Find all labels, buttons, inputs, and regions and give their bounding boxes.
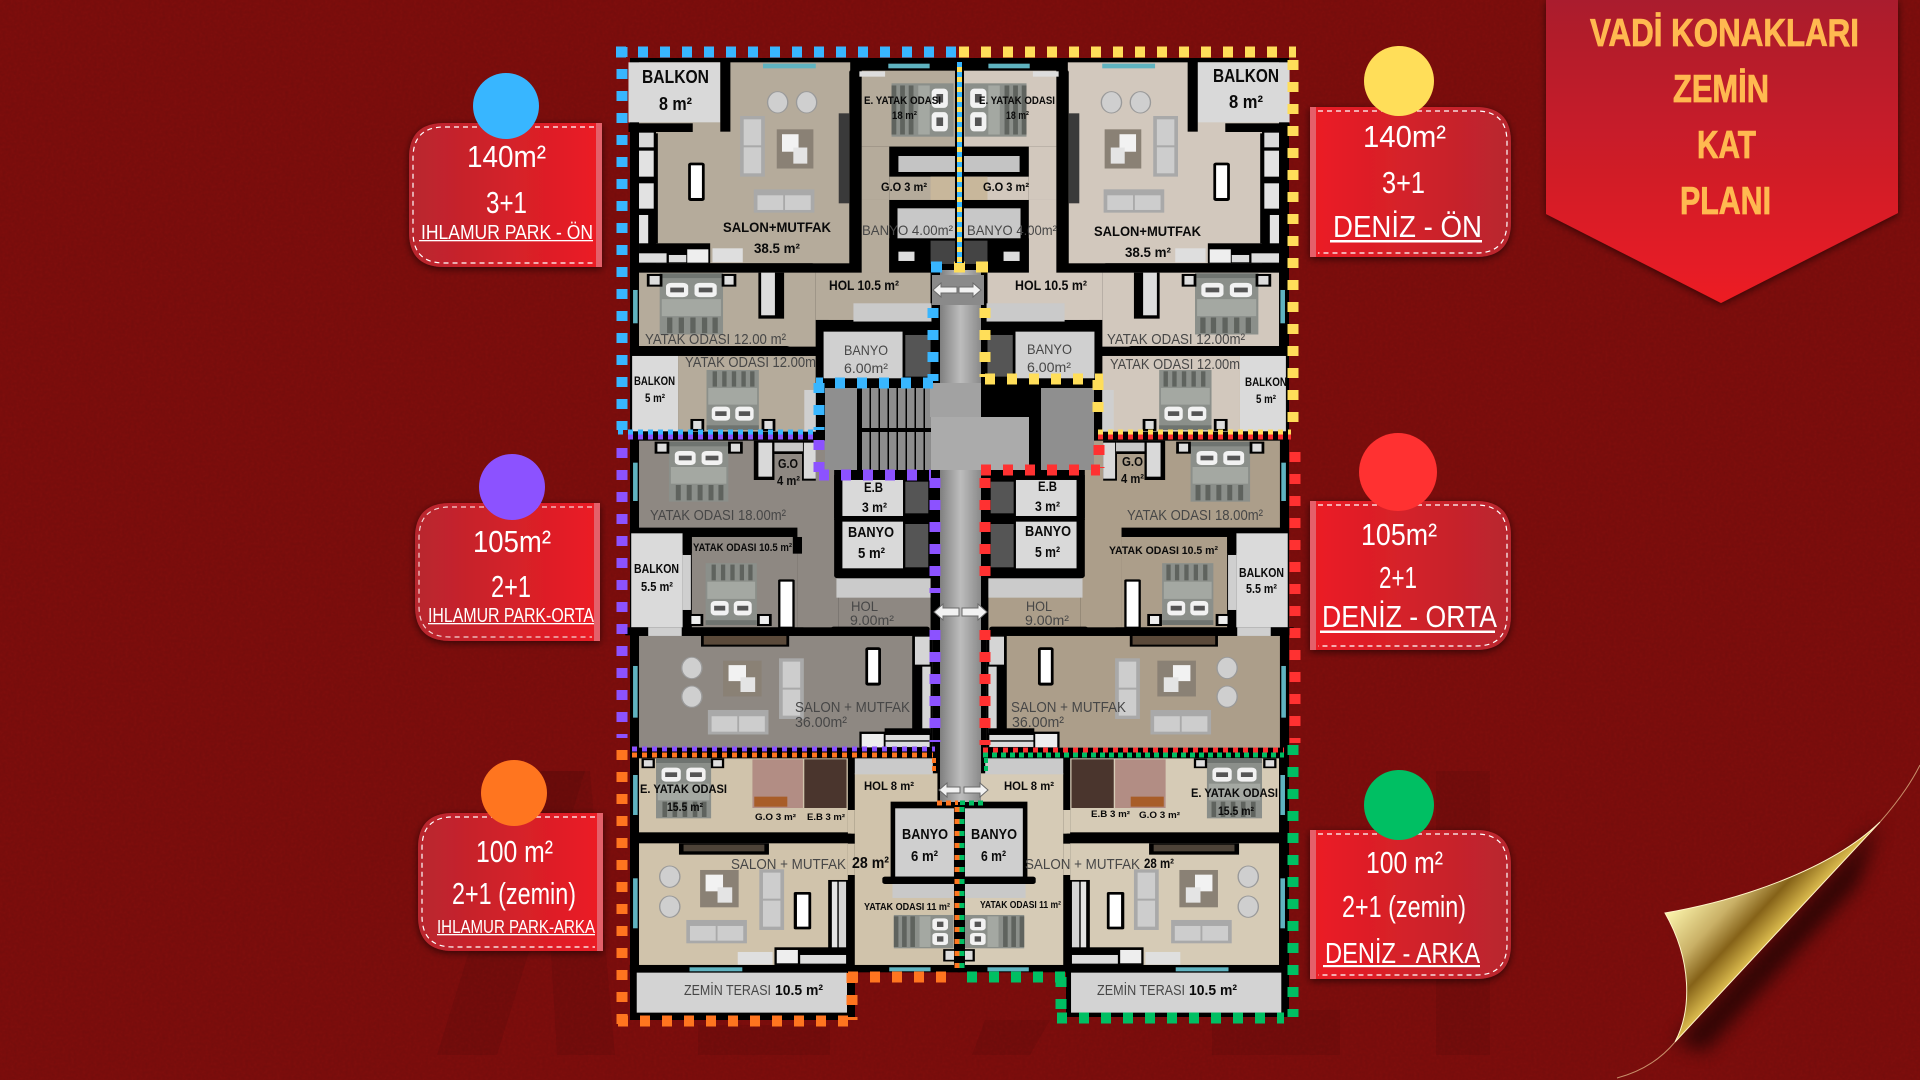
text: 2+1 (zemin) bbox=[452, 876, 576, 911]
room labels: YATAK ODASI 12.00m bbox=[685, 354, 816, 371]
room labels: YATAK ODASI 10.5 m² bbox=[1109, 545, 1218, 557]
room labels: 36.00m² bbox=[1012, 714, 1064, 731]
title text: ZEMİN bbox=[1673, 68, 1769, 111]
room labels: 6 m² bbox=[911, 848, 938, 865]
room labels: BANYO 4.00m² bbox=[862, 222, 953, 238]
apartments top row bbox=[628, 58, 1290, 432]
marker bbox=[473, 73, 539, 139]
callout: Deniz Ön bbox=[1310, 46, 1511, 257]
text: 100 m² bbox=[476, 834, 553, 869]
room labels: HOL 10.5 m² bbox=[829, 277, 899, 293]
centre seam blue and yellow bbox=[955, 60, 964, 263]
apartment outline: green bbox=[960, 745, 1293, 1018]
text: 2+1 bbox=[1379, 560, 1417, 595]
centre seam orange and green bbox=[957, 805, 962, 971]
room labels: HOL bbox=[851, 598, 878, 614]
apartments middle row bbox=[625, 441, 1294, 748]
plan base walls bbox=[630, 58, 1289, 1020]
apartments bottom row bbox=[630, 758, 1288, 1013]
curl sheet bbox=[1665, 822, 1880, 1042]
room labels: BALKON bbox=[1213, 66, 1279, 86]
callout: Deniz Arka bbox=[1310, 770, 1511, 979]
apartment outline: orange bbox=[618, 750, 958, 1025]
apartment outline: red bbox=[981, 437, 1295, 750]
room labels: 9.00m² bbox=[1025, 612, 1069, 628]
room labels: 38.5 m² bbox=[1125, 244, 1171, 260]
text: 2+1 bbox=[491, 569, 531, 604]
title text: KAT bbox=[1697, 124, 1756, 167]
room labels: BANYO 4.00m² bbox=[967, 222, 1057, 238]
room labels: E.B bbox=[864, 479, 883, 495]
room labels: 5.5 m² bbox=[1246, 581, 1278, 596]
room labels: BANYO bbox=[844, 342, 888, 358]
stitching bbox=[1318, 834, 1507, 975]
apartment outline: purple bbox=[622, 437, 935, 749]
room labels: HOL 10.5 m² bbox=[1015, 277, 1087, 293]
banner shape bbox=[1546, 0, 1898, 303]
callout: İhlamur Park Orta bbox=[415, 454, 600, 641]
room labels: 6 m² bbox=[981, 848, 1006, 865]
room labels: HOL 8 m² bbox=[1004, 779, 1054, 793]
room labels: 8 m² bbox=[1229, 92, 1263, 112]
text bbox=[428, 524, 595, 627]
room labels: E. YATAK ODASI bbox=[864, 95, 941, 107]
marker bbox=[1364, 46, 1434, 116]
room labels: 15.5 m² bbox=[1218, 804, 1254, 818]
room labels: 5.5 m² bbox=[641, 579, 674, 594]
room labels: SALON + MUTFAK bbox=[731, 856, 846, 873]
text bbox=[1323, 845, 1481, 970]
ribbon bbox=[1310, 501, 1511, 650]
room labels: YATAK ODASI 12.00m² bbox=[1107, 331, 1245, 348]
stitching bbox=[422, 817, 595, 947]
room labels: BANYO bbox=[971, 826, 1017, 843]
room labels: 36.00m² bbox=[795, 714, 847, 731]
text: 105m² bbox=[1361, 517, 1437, 552]
room labels: BALKON bbox=[634, 374, 675, 388]
callout: İhlamur Park Ön bbox=[409, 73, 602, 267]
ribbon bbox=[1310, 107, 1511, 257]
room labels: ZEMİN TERASI bbox=[1097, 981, 1185, 999]
room labels: 9.00m² bbox=[850, 612, 894, 628]
text: 140m² bbox=[1363, 119, 1446, 154]
room labels: 5 m² bbox=[645, 391, 665, 405]
corridor arrow bottom bbox=[939, 783, 988, 797]
text: 3+1 bbox=[486, 185, 527, 220]
text: 3+1 bbox=[1382, 165, 1425, 200]
ribbon bbox=[1310, 830, 1511, 979]
room labels: 3 m² bbox=[1035, 498, 1060, 514]
callout: Deniz Orta bbox=[1310, 433, 1511, 650]
room labels: 3 m² bbox=[862, 499, 887, 515]
text: IHLAMUR PARK-ORTA bbox=[428, 605, 595, 627]
callout: İhlamur Park Arka bbox=[418, 760, 603, 951]
curl shadow bbox=[1675, 822, 1880, 1052]
ribbon bbox=[418, 813, 603, 951]
room labels: G.O bbox=[1122, 454, 1143, 469]
room labels: 5 m² bbox=[858, 545, 885, 562]
room labels: 4 m² bbox=[1121, 471, 1145, 486]
room labels: SALON+MUTFAK bbox=[1094, 223, 1201, 239]
apartment outline: blue bbox=[616, 47, 958, 432]
text: 140m² bbox=[467, 139, 546, 174]
title banner bbox=[1546, 0, 1898, 303]
room labels: 10.5 m² bbox=[1189, 982, 1237, 999]
room labels: 5 m² bbox=[1035, 544, 1060, 561]
room labels: 4 m² bbox=[777, 473, 801, 488]
room labels: YATAK ODASI 12.00 m² bbox=[645, 331, 786, 348]
room labels: E.B 3 m² bbox=[807, 812, 845, 822]
room labels: 6.00m² bbox=[1027, 359, 1071, 375]
room labels: 15.5 m² bbox=[667, 800, 703, 814]
faint background ghost shapes bbox=[437, 771, 1490, 1055]
room labels: ZEMİN TERASI bbox=[684, 981, 771, 999]
room labels: E. YATAK ODASI bbox=[1191, 786, 1278, 800]
ribbon bbox=[409, 123, 602, 267]
room labels: 5 m² bbox=[1256, 392, 1276, 406]
room labels: BANYO bbox=[848, 524, 894, 541]
marker bbox=[481, 760, 547, 826]
room labels: E.B bbox=[1038, 478, 1057, 494]
room labels: YATAK ODASI 18.00m² bbox=[650, 507, 786, 524]
room labels: G.O 3 m² bbox=[881, 180, 927, 194]
room labels: 38.5 m² bbox=[754, 240, 800, 256]
room labels: G.O 3 m² bbox=[1139, 810, 1180, 820]
ribbon bbox=[415, 503, 600, 641]
room labels: YATAK ODASI 11 m² bbox=[980, 900, 1062, 911]
text: 2+1 (zemin) bbox=[1342, 889, 1466, 924]
room labels: 18 m² bbox=[1006, 110, 1029, 122]
corridor arrow middle bbox=[934, 604, 987, 620]
title text: VADİ KONAKLARI bbox=[1590, 12, 1859, 55]
room labels: YATAK ODASI 12.00m bbox=[1110, 356, 1240, 373]
room labels: HOL bbox=[1026, 598, 1052, 614]
stitching bbox=[1318, 505, 1507, 646]
room labels: SALON+MUTFAK bbox=[723, 219, 831, 235]
marker bbox=[479, 454, 545, 520]
room labels: BANYO bbox=[1027, 341, 1072, 357]
floor plan bbox=[616, 47, 1296, 1025]
curl highlight lines bbox=[1617, 765, 1920, 1078]
room labels: G.O 3 m² bbox=[755, 812, 796, 822]
room labels: BALKON bbox=[1239, 565, 1284, 580]
corridor arrow top bbox=[933, 283, 981, 297]
room labels: E. YATAK ODASI bbox=[979, 95, 1055, 107]
room labels: 6.00m² bbox=[844, 360, 888, 376]
central corridor and stairs bbox=[825, 270, 1094, 802]
room labels: G.O bbox=[778, 456, 798, 471]
text: DENİZ - ORTA bbox=[1322, 599, 1497, 634]
room labels: 10.5 m² bbox=[775, 982, 823, 999]
text bbox=[437, 834, 595, 937]
text bbox=[1330, 119, 1482, 244]
room labels: 8 m² bbox=[659, 94, 692, 114]
apartment outline: yellow bbox=[954, 52, 1296, 432]
room labels: HOL 8 m² bbox=[864, 779, 914, 793]
stitching bbox=[1318, 111, 1507, 253]
room labels bbox=[634, 66, 1287, 999]
room labels: 18 m² bbox=[892, 110, 917, 122]
text: 105m² bbox=[473, 524, 551, 559]
room labels: G.O 3 m² bbox=[983, 180, 1029, 194]
room labels: E. YATAK ODASI bbox=[640, 782, 727, 796]
text bbox=[1320, 517, 1497, 634]
room labels: 28 m² bbox=[1144, 855, 1174, 871]
text bbox=[419, 139, 593, 244]
stitching bbox=[413, 127, 594, 263]
room labels: SALON + MUTFAK bbox=[1025, 856, 1140, 873]
marker bbox=[1364, 770, 1434, 840]
room labels: SALON + MUTFAK bbox=[795, 699, 910, 716]
text: IHLAMUR PARK - ÖN bbox=[421, 222, 593, 244]
room labels: BALKON bbox=[642, 67, 709, 87]
room labels: YATAK ODASI 18.00m² bbox=[1127, 507, 1263, 524]
room labels: BANYO bbox=[1025, 523, 1071, 540]
room labels: SALON + MUTFAK bbox=[1011, 699, 1126, 716]
text: DENİZ - ÖN bbox=[1333, 209, 1482, 244]
room labels: BALKON bbox=[1245, 375, 1287, 389]
text: IHLAMUR PARK-ARKA bbox=[437, 917, 595, 937]
room labels: BANYO bbox=[902, 826, 948, 843]
title text: PLANI bbox=[1680, 180, 1771, 223]
marker bbox=[1359, 433, 1437, 511]
page curl corner bbox=[1617, 765, 1920, 1078]
text: 100 m² bbox=[1366, 845, 1443, 880]
room labels: BALKON bbox=[634, 561, 679, 576]
room labels: YATAK ODASI 10.5 m² bbox=[693, 542, 792, 554]
text: DENİZ - ARKA bbox=[1325, 937, 1481, 970]
room labels: YATAK ODASI 11 m² bbox=[864, 902, 951, 913]
stitching bbox=[419, 507, 592, 637]
title text bbox=[1590, 12, 1859, 223]
room labels: E.B 3 m² bbox=[1091, 809, 1130, 819]
room labels: 28 m² bbox=[852, 855, 889, 872]
